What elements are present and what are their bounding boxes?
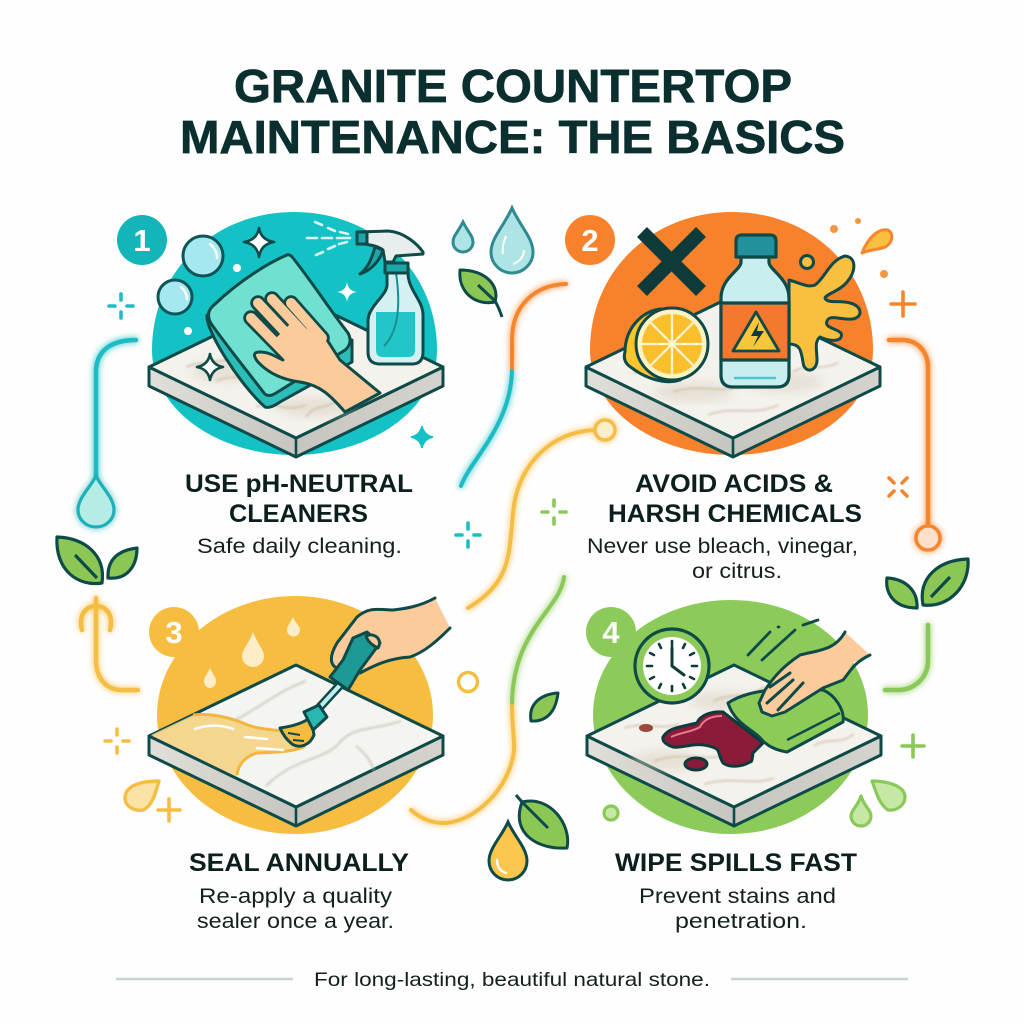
heading and text: step 1: CLEANERS [229, 500, 368, 528]
heading and text: step 2: HARSH CHEMICALS [608, 500, 862, 528]
brush [280, 632, 380, 746]
badge 2 [565, 215, 615, 265]
heading and text: step 1: USE pH-NEUTRAL [185, 470, 413, 498]
connector: orange right line with node [889, 340, 940, 550]
sparkle on slab [197, 354, 223, 380]
heading and text: step 2 [587, 470, 862, 583]
heading and text: step 3: Re-apply a quality [199, 885, 393, 908]
icon: right leaves [887, 559, 968, 608]
panel 2: acids illustration [565, 212, 892, 457]
heading and text: step 4: Prevent stains and [639, 885, 836, 908]
green backdrop [593, 600, 868, 834]
title: GRANITE COUNTERTOP [234, 60, 792, 112]
spray bottle [357, 231, 423, 364]
heading and text: step 1 [185, 470, 413, 558]
sealer coat [151, 714, 305, 777]
badge 1: 1 [133, 223, 151, 258]
connector: teal left line with drop [78, 340, 136, 527]
marble slab [149, 296, 443, 457]
connector: teal and orange centre line [461, 284, 566, 486]
hand holding brush [331, 598, 450, 673]
yellow backdrop [157, 596, 433, 834]
heading and text: step 1: Safe daily cleaning. [197, 535, 402, 558]
connector: green and yellow lower centre line [411, 577, 564, 823]
heading and text: step 2: Never use bleach, vinegar, [587, 535, 858, 558]
teal star [411, 426, 433, 448]
title: MAINTENANCE: THE BASICS [180, 111, 845, 163]
connector: green right line [885, 625, 928, 690]
chemical bottle [721, 235, 789, 387]
spray mist [307, 222, 350, 255]
heading and text: step 4: WIPE SPILLS FAST [615, 849, 857, 877]
bubbles [158, 236, 223, 314]
heading and text: step 3 [189, 849, 409, 933]
badge 1 [117, 215, 167, 265]
heading and text: step 2: AVOID ACIDS & [635, 470, 833, 498]
badge 3 [149, 607, 199, 657]
icon: top water drops [453, 208, 533, 273]
panel 4: spills illustration [586, 600, 905, 834]
green cloth [728, 690, 843, 752]
badge 4 [586, 607, 636, 657]
lemon [624, 308, 708, 382]
X mark [642, 232, 701, 291]
badge 2: 2 [581, 223, 599, 258]
badge 4: 4 [602, 615, 620, 650]
icon: top leaf [460, 270, 502, 317]
cloth [207, 255, 352, 407]
marble slab [586, 296, 880, 457]
hand [251, 299, 380, 412]
panel 1: cleaners illustration [117, 212, 443, 457]
badge 3: 3 [165, 615, 183, 650]
drop and dots [830, 218, 892, 278]
icon: small sparkles [105, 292, 924, 821]
hand wiping [759, 632, 870, 716]
connector: yellow left arrow [81, 598, 138, 690]
marble slab [149, 665, 443, 826]
drop [125, 781, 159, 810]
heading and text: step 3: SEAL ANNUALLY [189, 849, 409, 877]
connector: yellow centre line with node [468, 420, 615, 608]
icon: left leaves [57, 537, 137, 584]
heading and text: step 3: sealer once a year. [197, 910, 394, 933]
green ring and drops [604, 781, 905, 826]
cream drops [204, 617, 300, 688]
teal backdrop [152, 212, 437, 455]
orange backdrop [590, 212, 873, 455]
title [180, 60, 845, 163]
stain [639, 712, 763, 770]
heading and text: step 4 [615, 849, 857, 933]
clock [635, 629, 709, 703]
footer: For long-lasting, beautiful natural stone. [314, 969, 710, 991]
heading and text: step 4: penetration. [675, 910, 807, 933]
motion lines [748, 620, 818, 660]
heading and text: step 2: or citrus. [692, 560, 782, 583]
marble slab [587, 665, 881, 826]
splash [789, 256, 860, 370]
star and dots [184, 228, 357, 335]
icon: ring and lower leaves [458, 672, 568, 880]
panel 3: sealing illustration [125, 596, 450, 834]
